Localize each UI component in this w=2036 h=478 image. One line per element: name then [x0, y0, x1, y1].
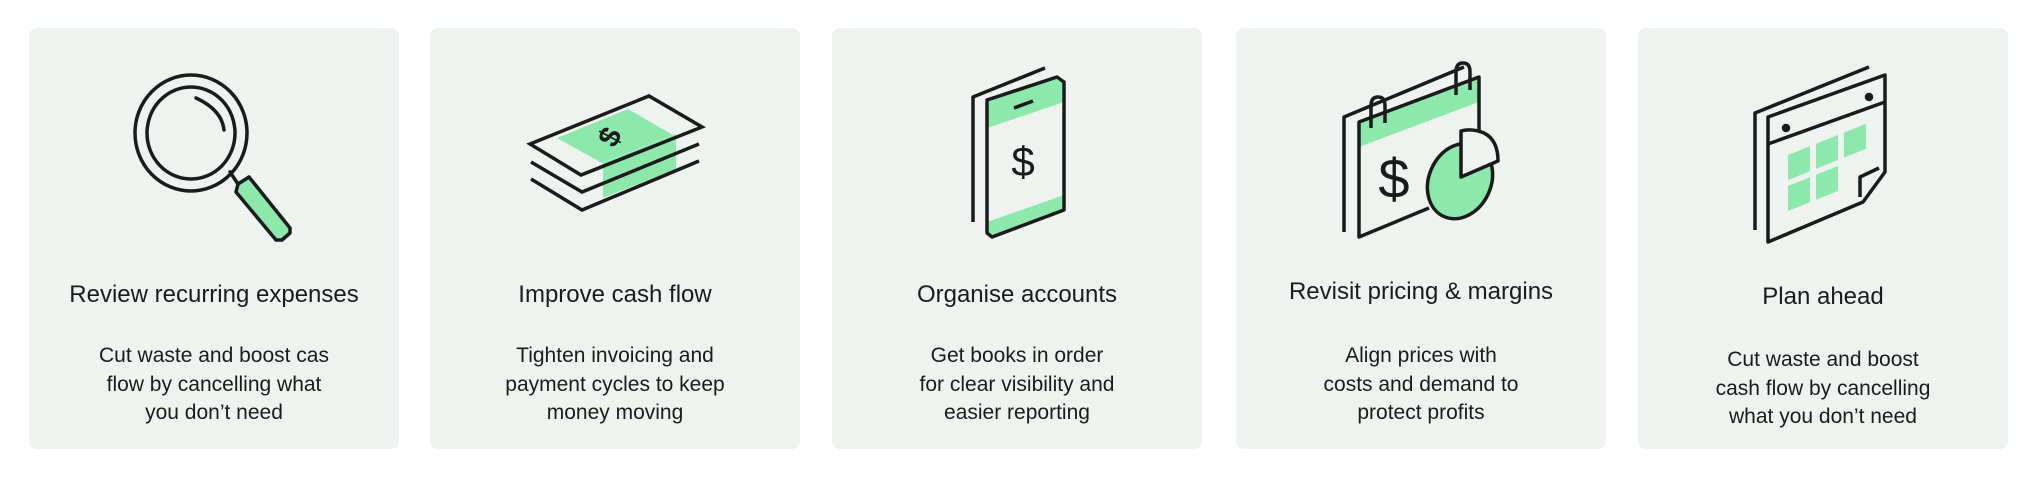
heading: Review recurring expenses [69, 281, 359, 308]
panel: review recurring expenses [29, 28, 399, 449]
text block: Cut waste and boost cas [99, 344, 329, 367]
heading: Plan ahead [1762, 283, 1884, 310]
heading: Improve cash flow [518, 281, 712, 308]
text block [1716, 348, 1930, 428]
text block: Align prices with [1345, 344, 1497, 367]
icon: money stack: $ [592, 122, 629, 152]
icon: phone [971, 66, 1066, 239]
icon: money stack [526, 94, 706, 212]
icon: phone: $ [1011, 138, 1035, 185]
heading: Revisit pricing & margins [1289, 278, 1553, 305]
text block: Cut waste and boost [1727, 348, 1919, 371]
text block [99, 344, 329, 424]
icon: calendar with pie chart [1342, 61, 1500, 239]
text block: cash flow by cancelling [1716, 376, 1930, 400]
icon: calendar grid [1753, 65, 1887, 244]
text block: Tighten invoicing and [516, 344, 714, 367]
text block: protect profits [1357, 401, 1485, 424]
text block: costs and demand to [1324, 372, 1518, 396]
text block: money moving [547, 401, 683, 424]
icon: magnifying glass [133, 73, 292, 242]
heading: Organise accounts [917, 281, 1117, 308]
text block [1324, 344, 1518, 424]
text block [920, 344, 1114, 424]
panel: plan ahead [1638, 28, 2008, 449]
panel: improve cash flow [430, 28, 800, 449]
text block: for clear visibility and [920, 372, 1114, 396]
panel: organise accounts [832, 28, 1202, 449]
text block: Get books in order [931, 344, 1103, 367]
text block: payment cycles to keep [505, 372, 725, 396]
text block [505, 344, 725, 424]
text block: flow by cancelling what [107, 372, 321, 396]
text block: easier reporting [944, 401, 1090, 424]
panel: revisit pricing [1236, 28, 1606, 449]
text block: you don’t need [145, 401, 283, 424]
text block: what you don’t need [1729, 405, 1917, 428]
icon: calendar with pie chart: $ [1378, 147, 1410, 210]
